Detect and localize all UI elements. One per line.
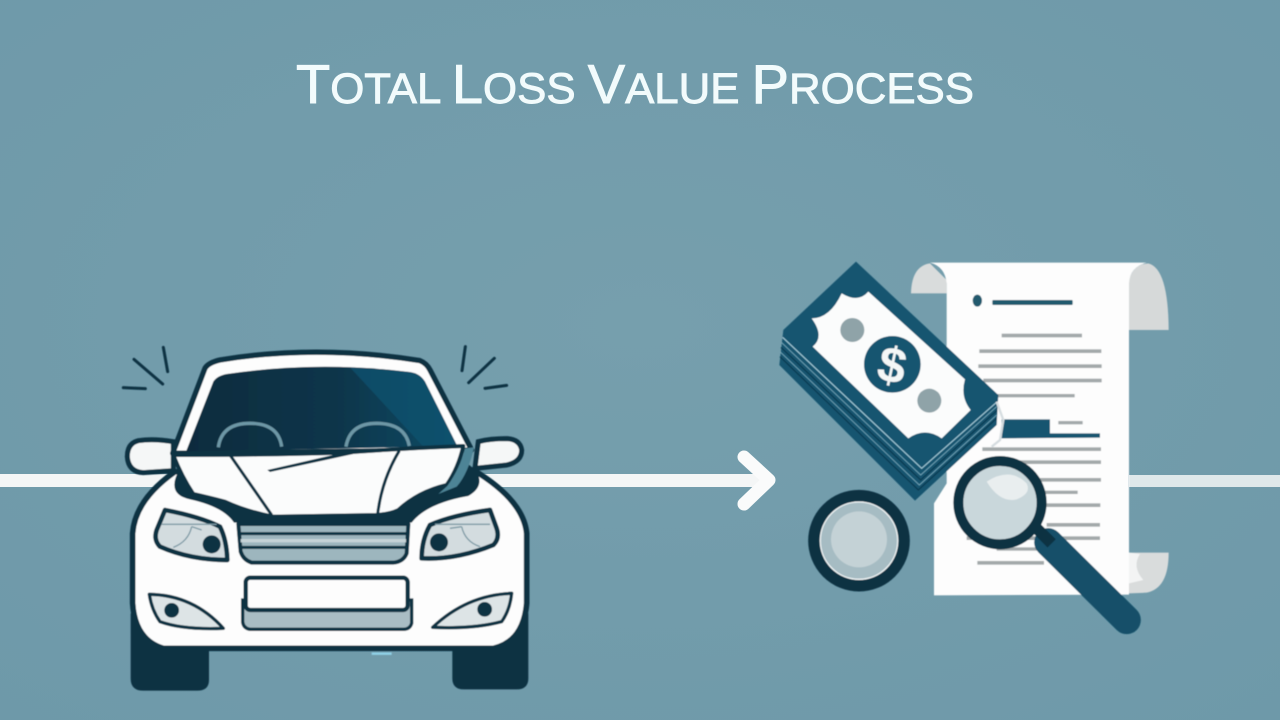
- document chart block: [1002, 419, 1100, 438]
- windshield reflection: [350, 367, 457, 447]
- icon: damaged car: [123, 347, 528, 691]
- icon: magnifying glass: [958, 461, 1127, 620]
- seats: [218, 423, 409, 447]
- windshield: [186, 367, 457, 452]
- right fog light: [433, 593, 512, 628]
- icon: stack of money: $: [873, 335, 912, 396]
- icon: stack of money: [779, 262, 1003, 501]
- license plate: [246, 578, 408, 610]
- document text lines: [967, 295, 1102, 565]
- document, money and magnifiers: [779, 262, 1169, 620]
- impact marks: [123, 347, 507, 389]
- icon: arrow head: [744, 457, 769, 504]
- crumpled hood: [173, 446, 474, 517]
- roof and pillars: [173, 352, 472, 453]
- dollar badge: [864, 336, 921, 393]
- process line with arrow: [0, 457, 1280, 504]
- icon: paper scroll document: [911, 263, 1169, 595]
- lower bumper: [243, 600, 412, 629]
- mirrors: [127, 440, 173, 473]
- left fog light: [149, 594, 223, 629]
- grille: [238, 524, 408, 563]
- left headlight: [156, 510, 227, 560]
- right headlight: [422, 510, 498, 558]
- icon: round lens: [814, 496, 904, 586]
- dark cavity under hood: [174, 453, 479, 523]
- bill face: [812, 292, 971, 438]
- wheels: [131, 613, 528, 691]
- car body: [133, 470, 527, 648]
- title: TOTAL LOSS VALUE PROCESS: [296, 53, 974, 115]
